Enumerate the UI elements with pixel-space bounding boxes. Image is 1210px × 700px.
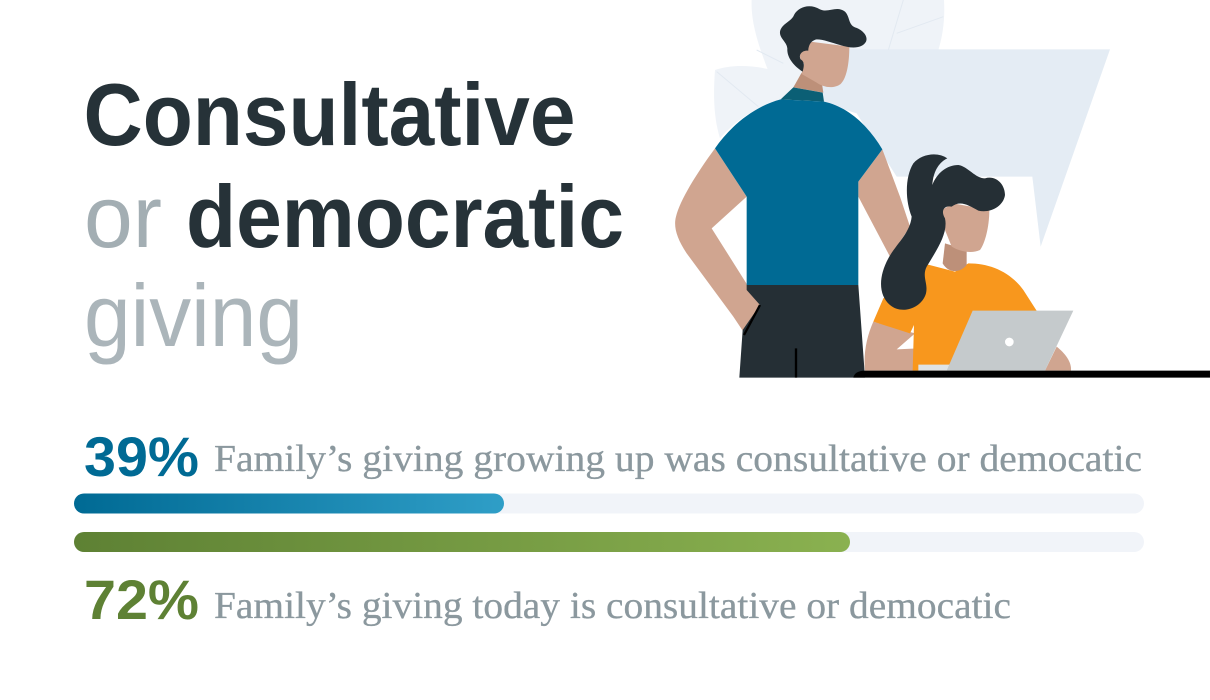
stat: 72% description: Family’s giving today is consultative or democatic xyxy=(214,585,1011,627)
title: democratic xyxy=(186,167,624,266)
man trousers xyxy=(739,285,865,378)
man neck and face xyxy=(793,73,823,93)
title: Consultative xyxy=(84,65,576,164)
title: giving xyxy=(84,266,303,365)
man hair xyxy=(780,6,867,72)
table xyxy=(853,371,1210,378)
woman xyxy=(865,154,1073,371)
man xyxy=(675,6,910,378)
title: or xyxy=(84,167,162,266)
woman hair xyxy=(881,154,1005,310)
bar: 72% xyxy=(74,532,1144,552)
man shirt xyxy=(715,99,882,285)
man arms xyxy=(675,148,760,332)
woman arms xyxy=(865,322,955,371)
woman face xyxy=(942,203,989,252)
man collar xyxy=(781,87,824,102)
stat: 72% heading: 72% xyxy=(84,568,199,631)
stat: 39% description: Family’s giving growing up was consultative or democatic xyxy=(214,438,1142,480)
bar: 39% xyxy=(74,494,1144,514)
illustration: two people with speech bubble xyxy=(675,0,1210,378)
laptop xyxy=(918,311,1073,371)
woman neck xyxy=(943,243,967,271)
stat: 39% heading: 39% xyxy=(84,425,199,488)
background leaves xyxy=(714,0,944,138)
woman shirt xyxy=(873,263,1038,371)
title xyxy=(84,65,624,365)
speech bubble xyxy=(803,49,1110,247)
